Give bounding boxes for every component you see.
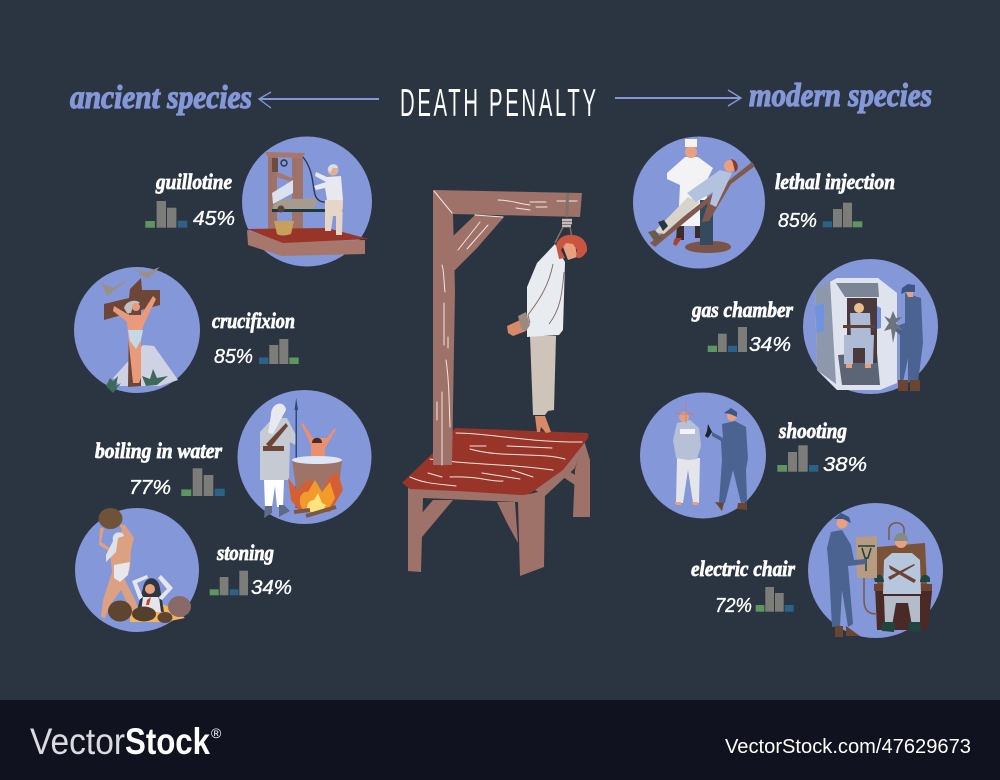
footer logo: Vector — [30, 721, 125, 762]
spear — [294, 398, 298, 508]
circle — [640, 392, 766, 518]
label: guillotine: guillotine — [155, 169, 232, 194]
boiling victim — [301, 423, 337, 470]
footer logo bold: Stock — [125, 721, 210, 762]
prisoner — [673, 402, 701, 505]
gallows side apron — [535, 446, 582, 496]
panel: lethal injection — [633, 136, 765, 268]
panel: boiling in water — [238, 390, 372, 524]
head — [556, 235, 587, 260]
value: electric chair: 72% — [715, 595, 752, 617]
basket — [274, 221, 294, 236]
bars: lethal injection — [823, 203, 862, 227]
control panel — [856, 536, 877, 614]
panel: crucifixion — [74, 267, 200, 393]
raised rock — [98, 508, 122, 529]
platform wood grain — [410, 433, 582, 486]
value: guillotine: 45% — [193, 208, 235, 230]
value: crucifixion: 85% — [214, 346, 253, 368]
registered mark: ® — [211, 725, 222, 741]
gallows platform — [402, 428, 589, 495]
prisoner — [843, 298, 877, 368]
central gallows illustration — [402, 190, 590, 576]
woman — [132, 575, 173, 612]
executioner — [303, 157, 343, 235]
bars: electric chair — [756, 587, 794, 612]
rocks — [108, 596, 191, 623]
gallows leg braces — [422, 467, 575, 543]
value: lethal injection: 85% — [778, 210, 817, 232]
gallows brace — [451, 215, 504, 273]
label: stoning: stoning — [216, 540, 274, 565]
value: shooting: 38% — [823, 454, 867, 476]
grass — [106, 369, 168, 393]
chair — [874, 523, 932, 630]
bars: stoning — [210, 571, 248, 595]
circle — [74, 267, 200, 393]
guard — [260, 404, 297, 518]
prisoner — [874, 533, 930, 632]
birds — [101, 267, 160, 296]
panel: stoning — [75, 508, 199, 632]
fire — [288, 473, 343, 516]
panel: guillotine — [242, 136, 372, 266]
cauldron — [292, 456, 342, 495]
chamber — [815, 278, 897, 390]
heading: ancient species: ancient species — [70, 80, 252, 116]
circle — [238, 390, 372, 524]
man throwing — [99, 524, 140, 618]
shirt — [527, 244, 565, 337]
gallows wood grain — [434, 191, 577, 465]
footer bar — [0, 700, 1000, 780]
shirt folds — [528, 264, 564, 324]
bars: guillotine — [145, 201, 187, 228]
feet — [535, 416, 551, 433]
victim on bench — [272, 198, 343, 212]
label: boiling in water: boiling in water — [95, 438, 222, 463]
bars: boiling in water — [181, 468, 225, 496]
bars: gas chamber — [708, 327, 747, 352]
circle — [808, 503, 943, 638]
hand — [507, 320, 526, 336]
heading: modern species: modern species — [749, 78, 932, 114]
arrow: to modern species — [615, 90, 741, 106]
label: gas chamber: gas chamber — [691, 297, 793, 322]
guillotine frame — [265, 152, 305, 235]
doctor — [667, 139, 713, 246]
label: crucifixion: crucifixion — [212, 308, 295, 333]
guard — [705, 408, 748, 511]
panel: electric chair — [808, 503, 943, 638]
footer image id: VectorStock.com/47629673 — [725, 736, 971, 758]
pants — [530, 336, 556, 415]
figure — [113, 296, 156, 383]
label: shooting: shooting — [778, 418, 847, 443]
injection bed — [650, 162, 755, 253]
operator — [827, 513, 866, 637]
gallows post — [433, 190, 455, 465]
value: stoning: 34% — [251, 577, 292, 599]
value: boiling in water: 77% — [129, 477, 171, 499]
gallows beam — [433, 190, 582, 217]
platform — [247, 228, 369, 256]
title: DEATH PENALTY — [400, 81, 596, 125]
label: electric chair: electric chair — [691, 556, 795, 581]
rope — [555, 193, 572, 243]
circle — [803, 259, 938, 394]
gallows back leg — [573, 437, 590, 517]
circle — [242, 136, 372, 266]
label: lethal injection: lethal injection — [775, 169, 895, 194]
value: gas chamber: 34% — [749, 334, 791, 356]
patient — [648, 159, 738, 242]
mountain — [113, 345, 178, 386]
gallows front legs — [408, 488, 545, 576]
panel: gas chamber — [803, 259, 938, 394]
sand — [130, 604, 185, 622]
cross — [104, 278, 160, 387]
bars: crucifixion — [259, 339, 299, 364]
circle — [633, 136, 765, 268]
guard — [884, 284, 923, 391]
bars: shooting — [777, 445, 818, 472]
panel: shooting — [640, 392, 766, 518]
arrow: to ancient species — [259, 92, 379, 108]
wrist rope — [518, 312, 530, 331]
circle — [75, 508, 199, 632]
